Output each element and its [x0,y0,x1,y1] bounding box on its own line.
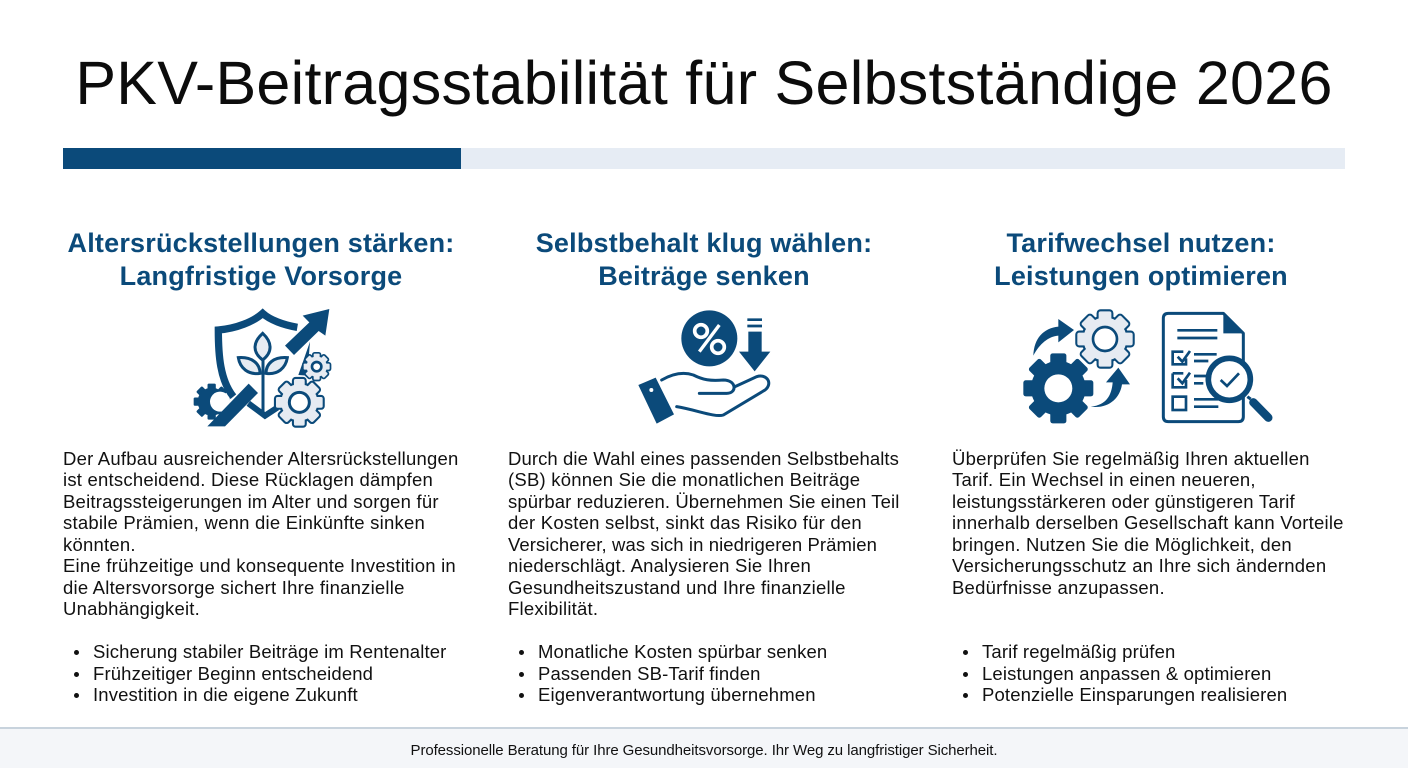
bullet list: column 3 [963,641,1287,705]
body text: column 1: stabile Prämien, wenn die Einkünfte sinken [63,512,425,533]
body text: column 2: Versicherer, was sich in niedrigeren Prämien [508,534,877,555]
bullet list: column 1 [74,641,446,705]
body text: column 1 [63,448,459,619]
bullet list: column 2 [519,641,827,705]
bullet list: column 2: Monatliche Kosten spürbar senken [538,641,827,662]
body text: column 1: könnten. [63,534,136,555]
footer [0,727,1408,768]
icon: shield with plant, arrow and gears [194,308,332,428]
bullet list: column 3: Leistungen anpassen & optimieren [982,662,1271,684]
body text: column 2: der Kosten selbst, sinkt das Risiko für den [508,512,862,533]
body text: column 3: leistungsstärkeren oder günstigeren Tarif [952,491,1295,512]
body text: column 2: spürbar reduzieren. Übernehmen Sie einen Teil [508,491,899,512]
body text: column 1: Der Aufbau ausreichender Altersrückstellungen [63,448,459,469]
heading: column 3: Tarifwechsel nutzen: [1006,228,1276,258]
footer: Professionelle Beratung für Ihre Gesundheitsvorsorge. Ihr Weg zu langfristiger Sicherheit. [411,742,997,759]
body text: column 1: Unabhängigkeit. [63,598,200,619]
bullet list: column 3: Tarif regelmäßig prüfen [982,641,1175,662]
body text: column 3: Versicherungsschutz an Ihre sich ändernden [952,555,1326,576]
bullet list: column 1: Frühzeitiger Beginn entscheidend [93,662,373,684]
heading: column 2: Selbstbehalt klug wählen: [536,228,872,258]
body text: column 3: bringen. Nutzen Sie die Möglichkeit, den [952,534,1292,555]
body text: column 1: ist entscheidend. Diese Rücklagen dämpfen [63,469,433,490]
body text: column 3: innerhalb derselben Gesellschaft kann Vorteile [952,512,1344,533]
icon: gears and checklist with magnifier [1023,309,1272,424]
body text: column 1: Eine frühzeitige und konsequente Investition in [63,555,456,576]
body text: column 2: (SB) können Sie die monatlichen Beiträge [508,469,860,490]
heading: column 3: Leistungen optimieren [994,261,1288,291]
body text: column 2: Flexibilität. [508,598,598,619]
body text: column 2: niederschlägt. Analysieren Sie Ihren [508,555,811,576]
icon: hand with percent coin and down arrow [638,310,770,424]
bullet list: column 3: Potenzielle Einsparungen realisieren [982,684,1287,705]
bullet list: column 1: Investition in die eigene Zukunft [93,684,358,705]
bullet list: column 2: Passenden SB-Tarif finden [538,662,761,684]
body text: column 1: Beitragssteigerungen im Alter und sorgen für [63,491,439,512]
body text: column 3: Bedürfnisse anzupassen. [952,577,1165,598]
body text: column 2: Durch die Wahl eines passenden Selbstbehalts [508,448,899,469]
heading: column 1 [68,228,454,291]
heading: column 1: Langfristige Vorsorge [120,261,402,291]
heading: column 2 [536,228,872,291]
heading: column 1: Altersrückstellungen stärken: [68,228,454,258]
body text: column 3: Überprüfen Sie regelmäßig Ihren aktuellen [952,448,1310,469]
title: PKV-Beitragsstabilität für Selbstständige 2026 [75,49,1333,117]
body text: column 3 [952,448,1344,598]
heading: column 3 [994,228,1288,291]
body text: column 2: Gesundheitszustand und Ihre finanzielle [508,577,846,598]
body text: column 2 [508,448,899,619]
bullet list: column 2: Eigenverantwortung übernehmen [538,684,816,705]
heading: column 2: Beiträge senken [598,261,810,291]
body text: column 3: Tarif. Ein Wechsel in einen neueren, [952,469,1256,490]
bullet list: column 1: Sicherung stabiler Beiträge im Rentenalter [93,641,446,662]
body text: column 1: die Altersvorsorge sichert Ihre finanzielle [63,577,405,598]
progress bar [63,148,1345,169]
